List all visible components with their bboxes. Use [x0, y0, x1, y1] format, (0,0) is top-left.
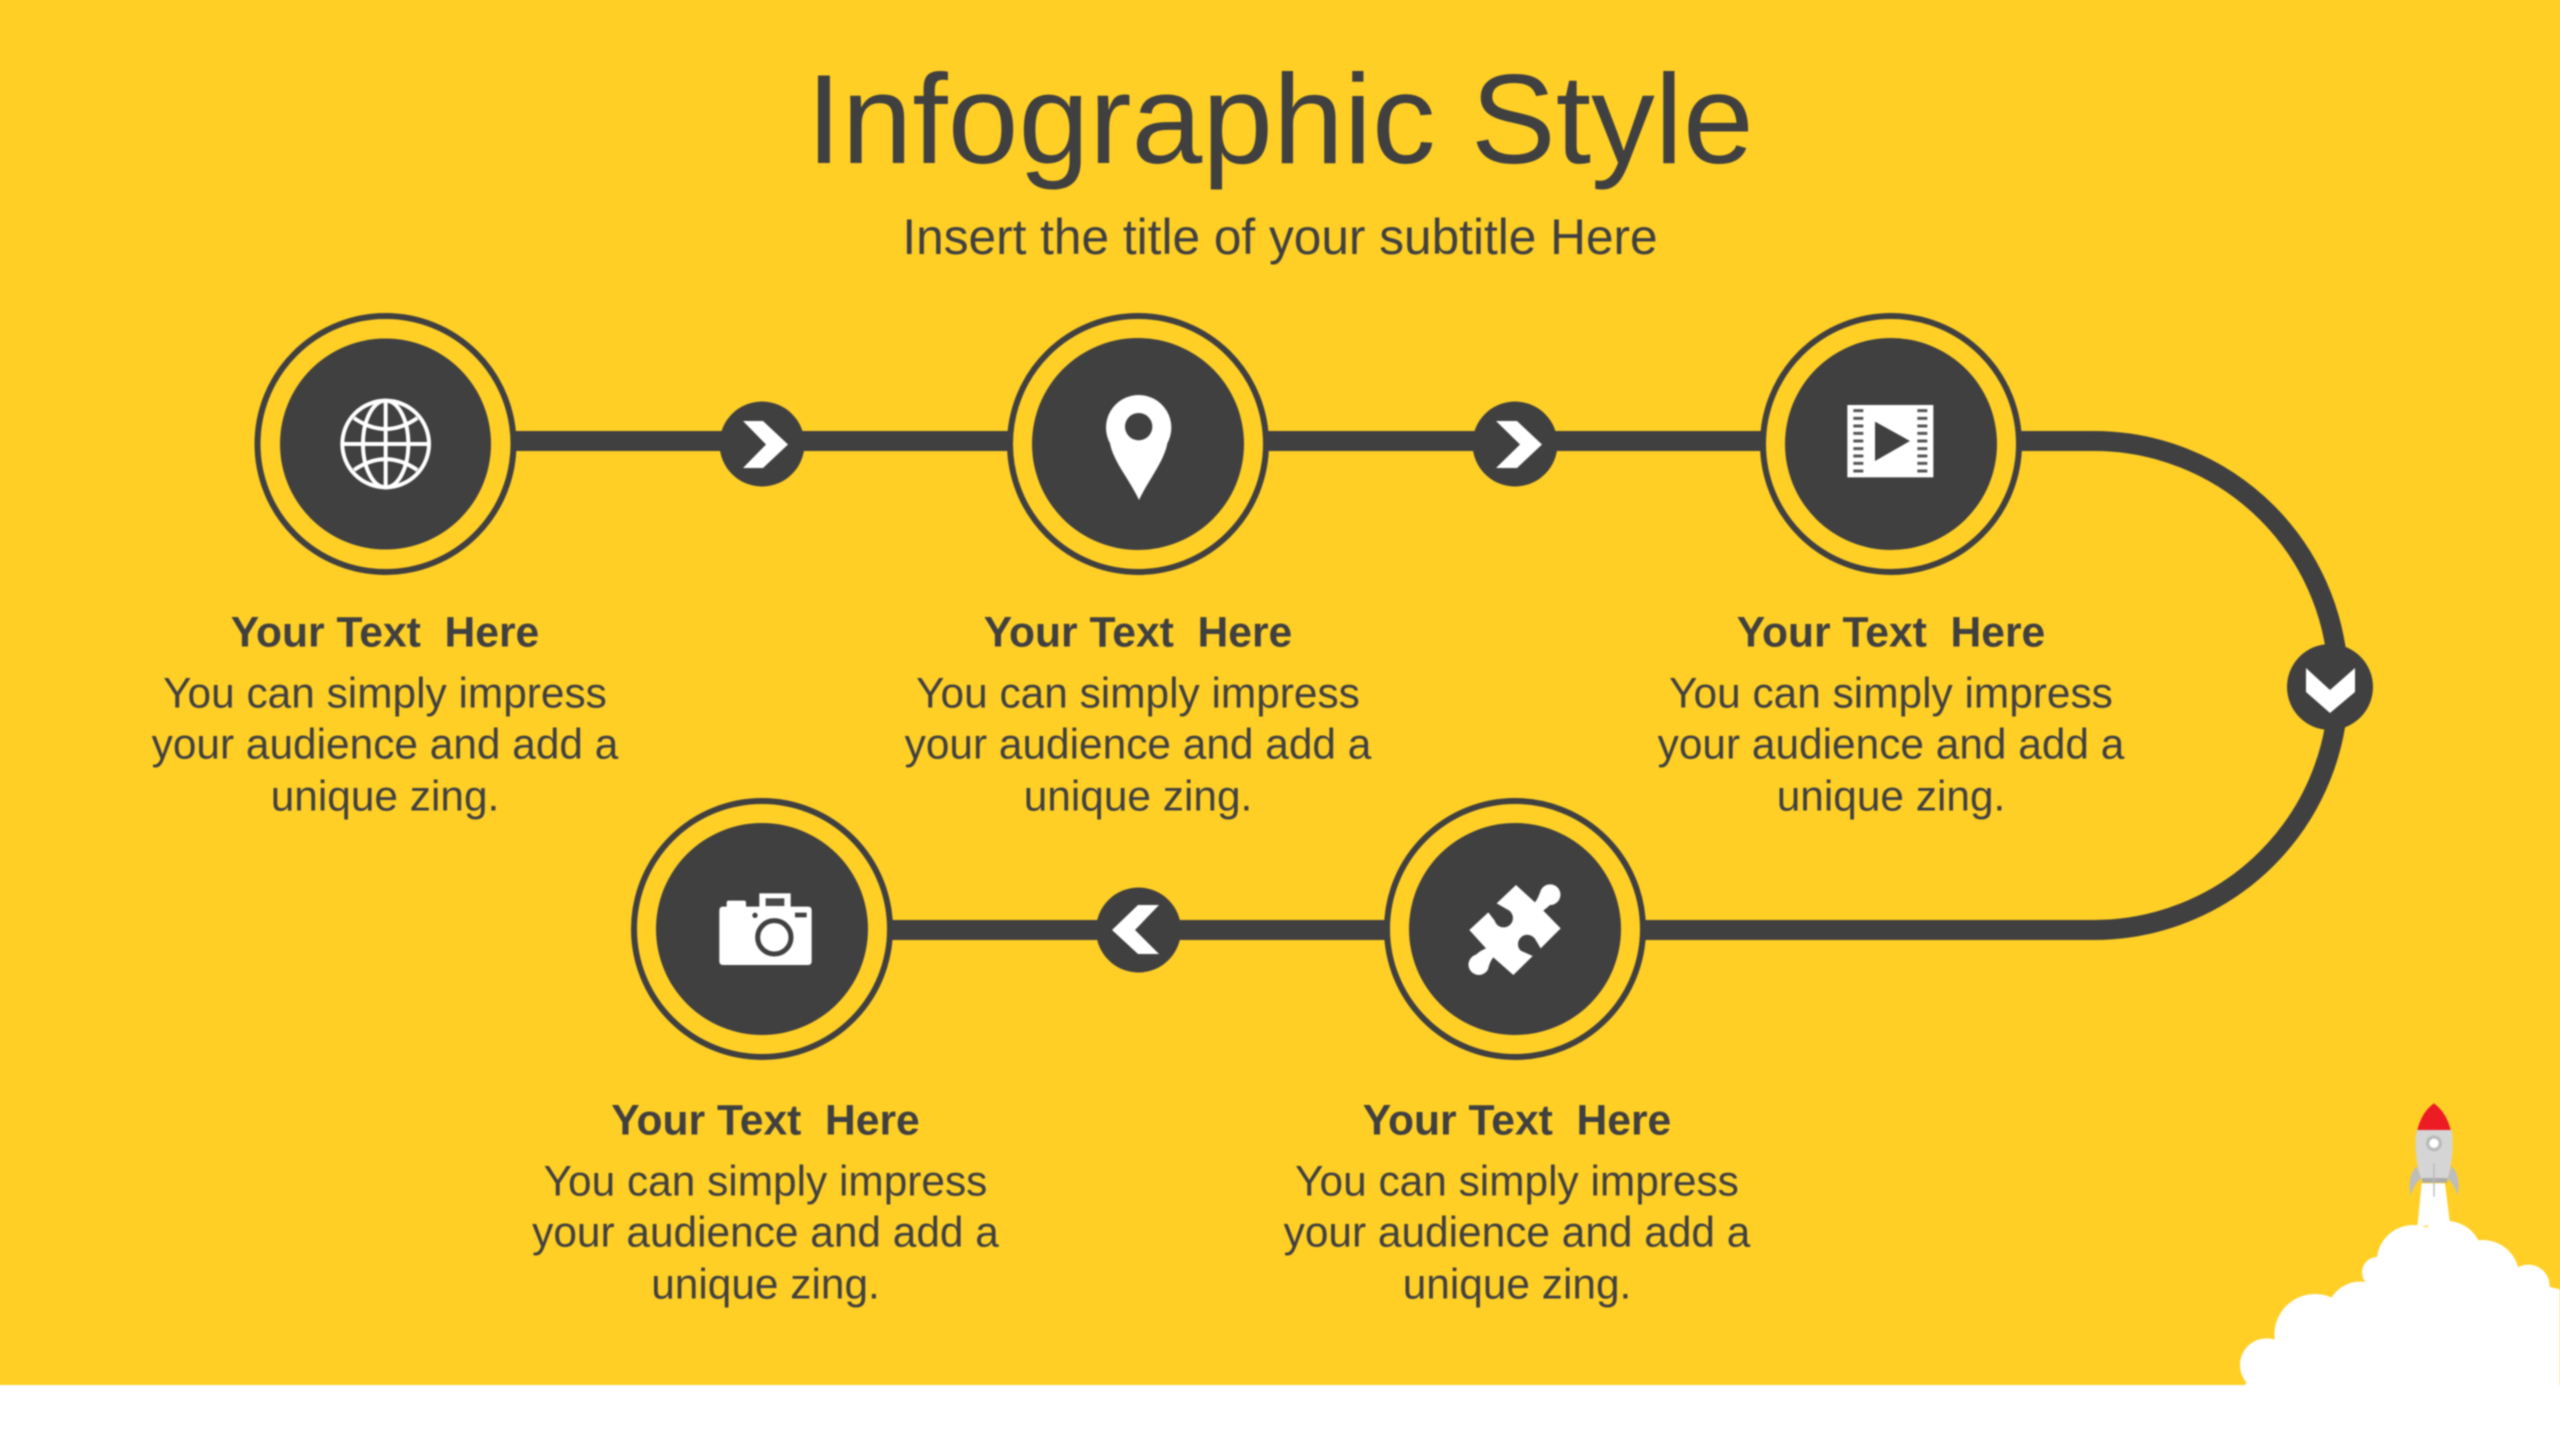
step 3 text: unique zing. — [1777, 772, 2005, 820]
arrow: step 1 to step 2 — [720, 402, 804, 486]
step 2 text: Your Text Here — [984, 608, 1292, 656]
step 2 text: unique zing. — [1024, 772, 1252, 820]
arrow: step 2 to step 3 — [1472, 402, 1558, 486]
icon: map pin — [1106, 395, 1171, 500]
step 1 node: globe — [258, 316, 514, 572]
subtitle: Insert the title of your subtitle Here — [902, 209, 1658, 265]
step 3 text — [1658, 608, 2125, 820]
step 1 text — [152, 608, 619, 820]
white cloud and ground — [0, 1183, 2560, 1440]
step 5 text: You can simply impress — [544, 1158, 987, 1204]
step 2 node: map pin — [1010, 316, 1266, 572]
step 3 text: your audience and add a — [1658, 720, 2125, 768]
icon: puzzle piece — [1468, 884, 1561, 975]
step 2 text: You can simply impress — [916, 670, 1360, 716]
step 5 text: unique zing. — [651, 1260, 880, 1308]
arrow: step 4 to step 5 — [1096, 888, 1181, 972]
step 3 text: Your Text Here — [1737, 608, 2045, 656]
title: Infographic Style — [806, 48, 1754, 190]
step 1 text: Your Text Here — [231, 608, 539, 656]
arrow: curve downward — [2287, 644, 2373, 730]
step 2 text — [905, 608, 1372, 820]
step 1 text: unique zing. — [271, 772, 499, 820]
step 4 node: puzzle piece — [1387, 801, 1643, 1057]
step 5 text — [532, 1096, 999, 1308]
step 4 text — [1284, 1096, 1751, 1308]
step 4 text: You can simply impress — [1295, 1158, 1739, 1204]
icon: rocket — [2410, 1103, 2459, 1197]
step 5 text: Your Text Here — [611, 1096, 920, 1144]
step 2 text: your audience and add a — [905, 720, 1372, 768]
icon: camera — [719, 893, 812, 965]
step 4 text: Your Text Here — [1363, 1096, 1671, 1144]
step 3 text: You can simply impress — [1669, 670, 2113, 716]
icon: film strip — [1847, 405, 1933, 477]
step 5 text: your audience and add a — [532, 1208, 999, 1256]
step 1 text: You can simply impress — [163, 670, 607, 716]
connector path — [386, 441, 2338, 930]
step 5 node: camera — [634, 801, 890, 1057]
icon: globe — [342, 401, 429, 487]
step 1 text: your audience and add a — [152, 720, 619, 768]
step 4 text: your audience and add a — [1284, 1208, 1751, 1256]
step 4 text: unique zing. — [1403, 1260, 1631, 1308]
step 3 node: film — [1763, 316, 2019, 572]
